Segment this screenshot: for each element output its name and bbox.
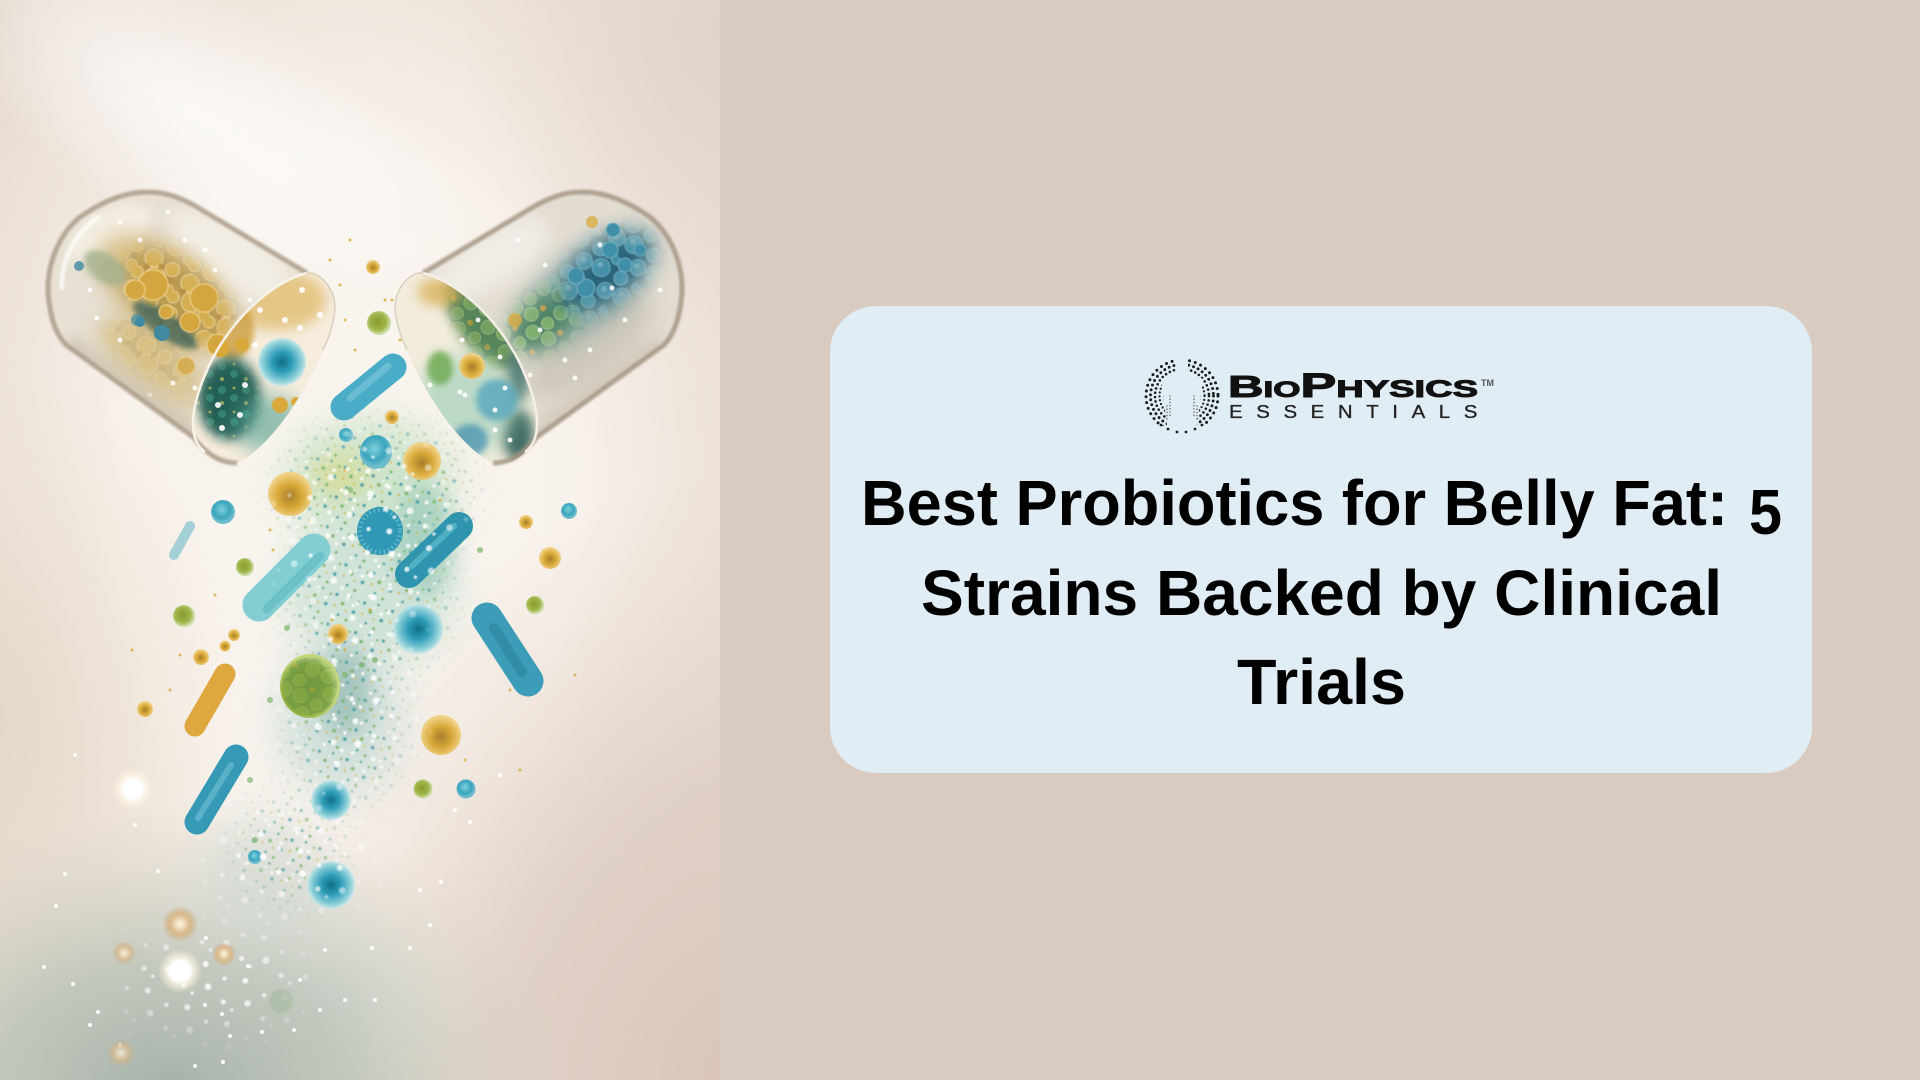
teal cells bbox=[211, 338, 577, 909]
capsule: right half bbox=[390, 185, 690, 470]
right capsule rim bbox=[395, 192, 682, 463]
lens flares bbox=[112, 768, 202, 993]
left capsule opening bbox=[194, 274, 334, 462]
left capsule body and contents bbox=[50, 194, 303, 436]
green spheres bbox=[173, 311, 544, 798]
title: 5 bbox=[1749, 476, 1782, 548]
title: Best Probiotics for Belly Fat: bbox=[861, 467, 1728, 539]
right capsule body and contents bbox=[427, 194, 679, 436]
white sparkles bbox=[44, 430, 540, 1066]
title bbox=[861, 467, 1782, 718]
logo trademark: TM bbox=[1481, 378, 1494, 388]
green globe bbox=[280, 654, 340, 718]
logo wordmark: B IO P HYSICS bbox=[1228, 367, 1478, 405]
probiotic rods bbox=[174, 366, 528, 822]
illustration backdrop bbox=[0, 0, 720, 1080]
left capsule rim bbox=[48, 192, 335, 463]
capsule: left half bbox=[40, 185, 340, 470]
gold spheres bbox=[137, 260, 561, 755]
right capsule opening bbox=[396, 274, 536, 463]
title: Strains Backed by Clinical bbox=[921, 557, 1722, 629]
logo icon: dotted circle with human silhouette bbox=[1142, 355, 1222, 436]
bokeh orbs bbox=[107, 906, 293, 1067]
panel: probiotic capsule illustration bbox=[0, 0, 720, 1080]
panel: title card bbox=[830, 306, 1812, 773]
logo tagline: ESSENTIALS bbox=[1229, 402, 1491, 422]
title: Trials bbox=[1237, 646, 1406, 718]
particle stream cloud bbox=[132, 240, 575, 960]
logo: BioPhysics Essentials bbox=[1142, 355, 1494, 436]
